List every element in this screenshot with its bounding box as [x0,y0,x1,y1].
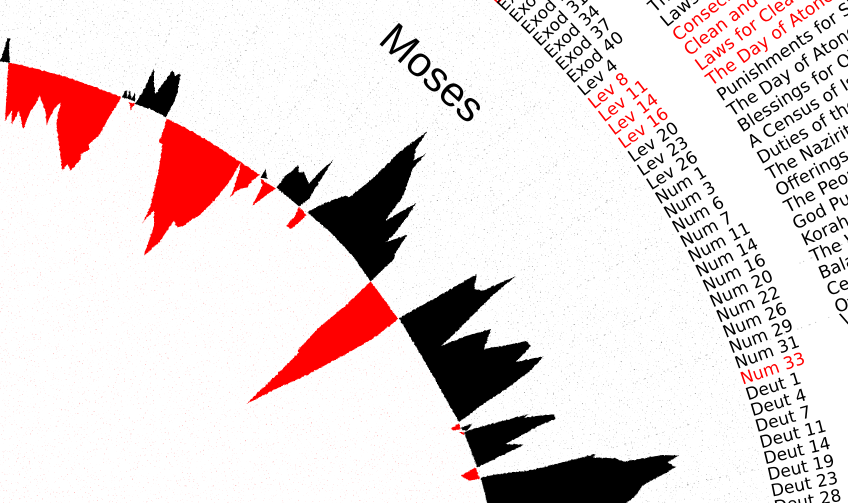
black spike block 10 [464,414,555,467]
spikes, upper left group [0,38,679,503]
chapter labels column: Num 7 [677,208,736,252]
chapter labels column: Num 26 [720,299,790,343]
chapter labels column: Deut 1 [743,369,804,405]
chapter labels column: Num 20 [707,266,776,312]
chapter labels column: Num 3 [661,178,719,223]
small black fragment [461,424,472,431]
chapter labels column: Lev 14 [605,90,663,140]
black spike block 8 [307,131,427,281]
chapter labels column: Deut 4 [748,385,809,421]
chapter labels column: Lev 26 [643,147,702,195]
red spike block 1 [5,62,121,171]
black spike block 6 [276,160,333,206]
chapter labels column: Num 31 [732,332,802,374]
chapter labels column: Lev 20 [625,118,683,167]
title: Moses: Moses [371,14,494,131]
chapter labels column: Num 1 [652,163,711,209]
chapter labels column: Exod 40 [563,28,628,88]
large red spike [246,281,398,404]
chapter labels column: Deut 23 [769,468,840,502]
section titles column [644,0,848,343]
chapter labels column: Num 14 [693,234,762,282]
chapter labels column: Deut 14 [762,434,833,469]
chapter labels column: Exod 34 [541,1,605,63]
tiny black spike [261,169,267,179]
chapter labels column: Num 16 [700,250,769,297]
upper spike blocks [0,38,333,256]
chapter labels column: Deut 7 [753,402,814,437]
black spike block 11 [481,454,679,503]
second small red mark [459,432,464,435]
red spike block 5 [252,179,276,206]
small black comb [122,91,135,102]
speckled red noise inside the arc [0,61,483,503]
chapter labels column: Lev 4 [574,56,622,100]
chapter labels column: Num 29 [726,316,796,358]
chapter labels column: Deut 19 [766,451,836,485]
black spike block 9 [399,274,544,422]
black spike block 2 [135,69,181,117]
chapter labels column [486,0,843,503]
chapter labels column: Num 6 [669,193,728,238]
chapter labels column: Exod 37 [552,14,616,75]
small red mark [451,423,461,431]
small red spike [129,102,135,110]
red spike block 4 [230,162,260,197]
chapter labels column: Lev 8 [585,69,633,113]
red spike block 3 [142,118,241,256]
middle spike blocks [246,131,427,404]
lower spike blocks [451,414,679,503]
chapter labels column: Num 11 [685,219,754,267]
chapter labels column: Lev 23 [634,133,692,181]
black spike far left [0,38,10,62]
chapter labels column: Lev 16 [615,104,673,153]
chapter labels column: Num 22 [714,283,783,327]
red spike block 7 [286,207,306,229]
gray radial speckle streaks [150,12,848,488]
chapter labels column: Deut 11 [758,417,828,453]
chapter labels column: Num 33 [738,349,808,389]
chapter labels column: Lev 11 [595,76,652,126]
red spike near bottom [461,467,480,481]
